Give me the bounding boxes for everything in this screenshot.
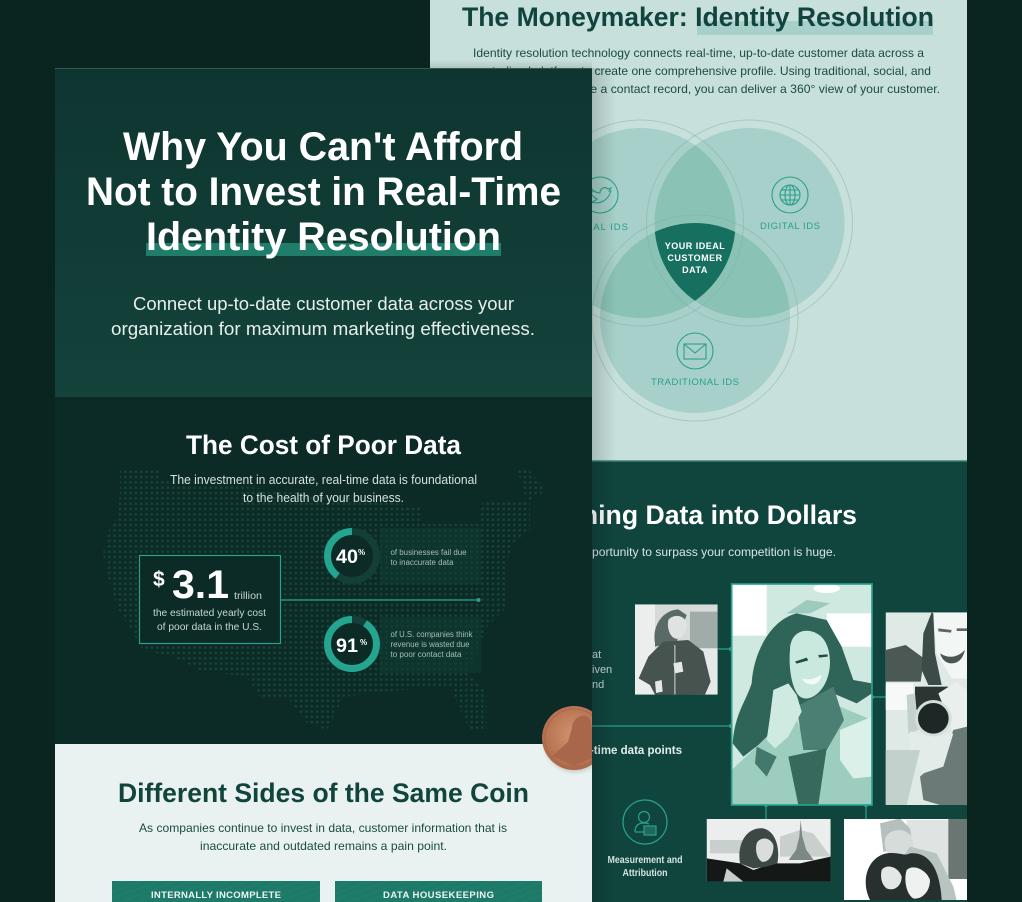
banner: internally incomplete: INTERNALLY INCOMPLETE <box>151 890 281 901</box>
text: identity resolution description: te a contact record, you can deliver a 360° view of your customer. <box>587 82 940 96</box>
donut chart: 91%: 91 <box>336 636 358 657</box>
stat: 40 percent: to inaccurate data <box>390 558 454 567</box>
stat: 40 percent: of businesses fail due <box>390 548 467 557</box>
text: identity resolution description: centralized platform to <box>473 64 591 78</box>
connector line <box>281 598 480 602</box>
heading: Different Sides of the Same Coin: Different Sides of the Same Coin <box>118 778 529 808</box>
panel: front infographic <box>55 68 606 902</box>
label: your ideal customer data <box>664 242 724 273</box>
text: identity resolution description: create one comprehensive profile. Using traditional, social, and <box>594 64 931 78</box>
connector lines <box>592 648 886 819</box>
banner: data housekeeping: DATA HOUSEKEEPING <box>383 890 494 901</box>
text: cost description <box>170 473 477 505</box>
stat: 91 percent: to poor contact data <box>390 650 462 659</box>
label: your ideal customer data: DATA <box>682 265 708 275</box>
banner: data housekeeping <box>335 881 542 902</box>
subtitle: organization for maximum marketing effectiveness. <box>111 319 535 339</box>
donut chart: 40%: 40 <box>336 547 358 568</box>
panel: different sides of the same coin <box>55 744 592 902</box>
title: Why You Can't Afford <box>123 125 523 169</box>
text: partly hidden description: at <box>592 649 601 661</box>
donut chart: 91%: % <box>360 638 367 647</box>
stat: 40 percent <box>328 528 481 584</box>
venn diagram <box>592 120 853 422</box>
text: measurement and attribution: Measurement and <box>608 855 682 866</box>
label: traditional IDs: TRADITIONAL IDS <box>651 377 739 388</box>
dotted US map <box>103 468 547 730</box>
front panel shadow <box>430 60 616 902</box>
donut chart: 40%: % <box>358 548 365 557</box>
donut chart: 91% <box>328 620 376 668</box>
label: social IDs: SOCIAL IDS <box>566 222 629 233</box>
panel: back infographic <box>430 0 967 902</box>
stat: 91 percent: of U.S. companies think <box>390 630 473 639</box>
panel: identity resolution section <box>430 0 967 461</box>
photo: three generations hugging <box>844 818 967 900</box>
text: partly hidden description <box>592 650 612 688</box>
label: digital IDs: DIGITAL IDS <box>760 221 820 232</box>
title: Identity Resolution <box>146 215 501 259</box>
text: coin description: As companies continue to invest in data, customer information that is <box>139 821 507 835</box>
panel: hero header <box>55 68 592 397</box>
heading: Turning Data into Dollars: Turning Data into Dollars <box>541 500 857 530</box>
callout: 3.1 trillion: the estimated yearly cost <box>153 607 266 619</box>
subtitle <box>111 294 535 339</box>
text: cost description: to the health of your business. <box>243 491 404 505</box>
text: opportunity subheading: portunity to surpass your competition is huge. <box>592 545 836 559</box>
panel: cost of poor data <box>55 397 592 744</box>
donut chart: 40% <box>328 532 376 580</box>
text: real-time data points: Real-time data points <box>566 745 682 757</box>
callout: 3.1 trillion <box>140 556 280 644</box>
text: opportunity subheading: The op <box>553 545 590 559</box>
text: coin description: inaccurate and outdated remains a pain point. <box>200 839 447 853</box>
photo: woman in Paris <box>707 819 831 882</box>
icon: twitter bird <box>592 176 618 214</box>
photo: woman with camera <box>886 612 967 805</box>
heading: The Moneymaker: The Moneymaker: Identity Resolution <box>462 2 934 32</box>
callout: 3.1 trillion: 3.1 <box>172 563 229 607</box>
title: Not to Invest in Real-Time <box>86 170 561 214</box>
stat: 91 percent <box>328 617 481 673</box>
text: identity resolution description: digital IDs to crea <box>492 82 585 96</box>
text: identity resolution description: Identity resolution technology connects real-time, up-to-date customer data across a <box>473 46 924 60</box>
subtitle: Connect up-to-date customer data across your <box>133 294 514 314</box>
banner: internally incomplete <box>112 881 320 902</box>
photo: woman running <box>635 604 718 695</box>
panel: turning data into dollars section <box>592 460 967 902</box>
text: partly hidden description: iven <box>592 664 612 676</box>
callout: 3.1 trillion: of poor data in the U.S. <box>157 621 262 633</box>
icon: penny <box>542 706 592 774</box>
icon: measurement and attribution <box>623 800 667 844</box>
icon: envelope <box>677 333 713 369</box>
text: cost description: The investment in accurate, real-time data is foundational <box>170 473 477 487</box>
text: partly hidden description: nd <box>592 679 604 691</box>
stat: 91 percent: revenue is wasted due <box>390 640 470 649</box>
text: identity resolution description <box>473 46 940 96</box>
text: coin description <box>139 821 507 853</box>
label: your ideal customer data: YOUR IDEAL <box>665 241 725 251</box>
photo: woman on phone <box>732 584 872 805</box>
callout: 3.1 trillion: $ <box>153 568 165 591</box>
icon: globe <box>772 177 808 213</box>
heading: The Cost of Poor Data: The Cost of Poor Data <box>186 430 462 460</box>
title <box>86 125 561 259</box>
text: measurement and attribution <box>608 856 682 876</box>
callout: 3.1 trillion: trillion <box>234 590 262 602</box>
label: your ideal customer data: CUSTOMER <box>667 253 723 263</box>
text: measurement and attribution: Attribution <box>622 868 668 879</box>
